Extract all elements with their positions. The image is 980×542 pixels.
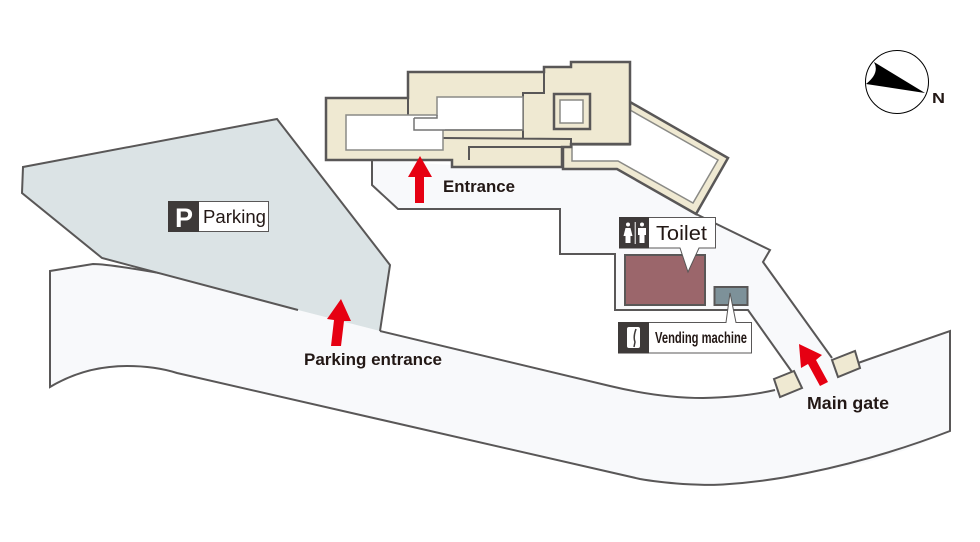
courtyard left bbox=[346, 97, 523, 150]
museum building bbox=[326, 62, 728, 214]
parking lot area bbox=[22, 119, 390, 331]
building wing bbox=[563, 102, 728, 214]
courtyard patch bbox=[415, 119, 445, 130]
vending machine text: Vending machine bbox=[655, 330, 747, 347]
gate post right bbox=[832, 351, 860, 377]
entrance arrow bbox=[408, 156, 432, 203]
building main body bbox=[326, 62, 630, 167]
courtyard notch lines bbox=[414, 115, 523, 130]
north label: N bbox=[932, 90, 945, 107]
vending machine icon bbox=[627, 327, 640, 348]
toilet text: Toilet bbox=[656, 222, 707, 245]
main gate label: Main gate bbox=[807, 393, 889, 413]
toilet icon bbox=[624, 222, 646, 244]
main gate arrow bbox=[799, 344, 828, 386]
vending machine block bbox=[714, 287, 748, 305]
vending icon detail bbox=[634, 329, 636, 347]
parking entrance arrow bbox=[327, 299, 351, 346]
atrium inner bbox=[560, 100, 583, 123]
compass bbox=[866, 50, 945, 114]
parking label bbox=[168, 201, 268, 233]
compass needle bbox=[866, 62, 925, 93]
entrance label: Entrance bbox=[443, 177, 515, 196]
gate post left bbox=[774, 371, 802, 397]
road and forecourt ground bbox=[50, 160, 950, 485]
building interior lines bbox=[408, 72, 571, 160]
parking entrance label: Parking entrance bbox=[304, 350, 442, 369]
atrium outer bbox=[554, 94, 590, 129]
parking text: Parking bbox=[203, 206, 266, 227]
parking P icon: P bbox=[175, 203, 193, 233]
building wing inner court bbox=[572, 110, 718, 203]
vending machine label bbox=[618, 293, 752, 354]
toilet label bbox=[619, 217, 716, 272]
toilet building bbox=[625, 255, 705, 305]
